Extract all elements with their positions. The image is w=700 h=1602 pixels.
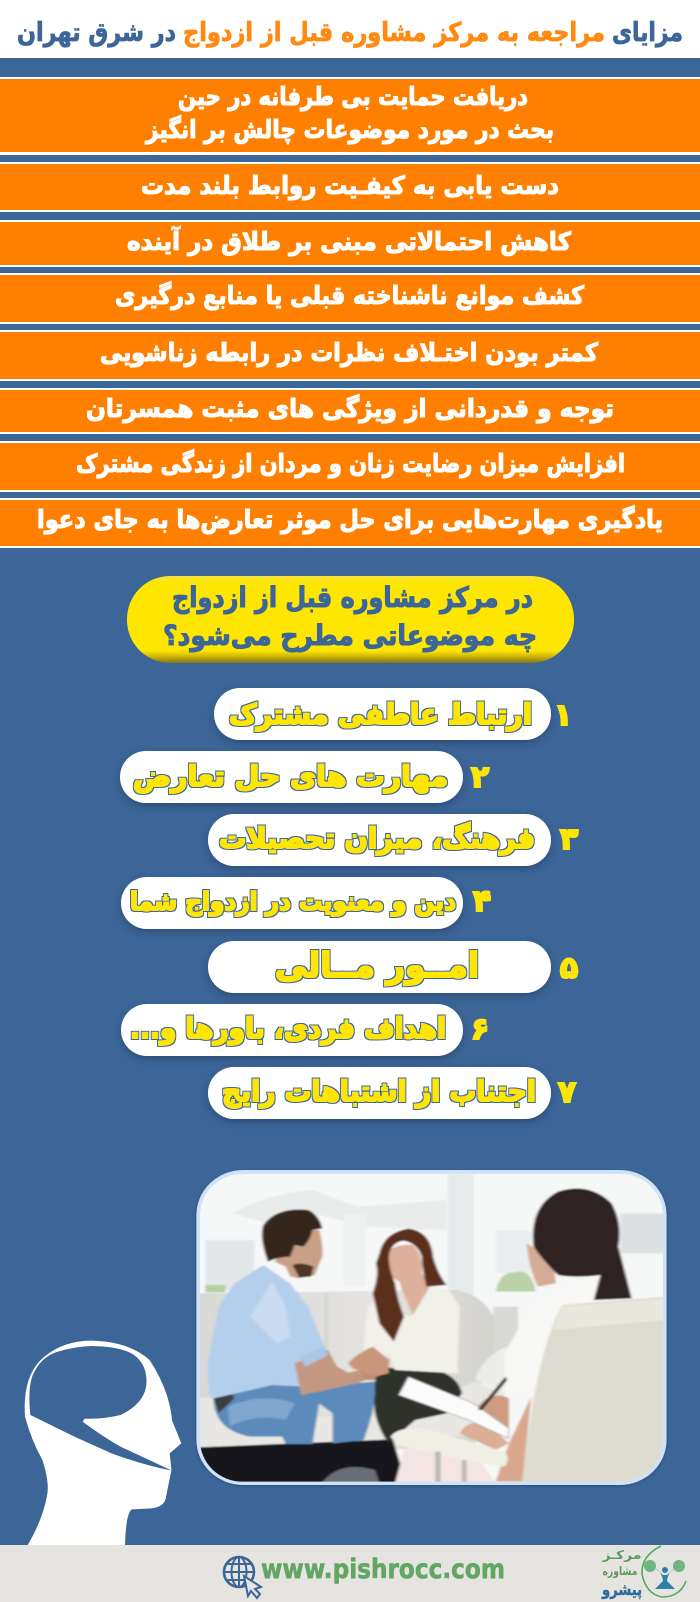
topic 4: دین و معنویت در ازدواج شما (130, 887, 456, 917)
logo: پیشرو (601, 1580, 642, 1600)
topic 2: مهارت های حل تعارض (133, 760, 448, 793)
panel: benefits list (0, 77, 700, 548)
logo: مرکـز (601, 1548, 642, 1562)
photo: counseling session (196, 1170, 670, 1485)
benefit 2: دست یابی به کیفـیت روابط بلند مدت (141, 171, 559, 201)
topic 1: ۱ (554, 698, 572, 733)
topic 5: امــور مــالی (275, 946, 479, 986)
heading: topics question (127, 576, 574, 663)
man (208, 1209, 386, 1444)
title: مراجعه به مرکز مشاوره قبل از ازدواج (183, 18, 605, 48)
benefit 4 (0, 273, 700, 324)
topic 2: ۲ (471, 760, 489, 795)
floor (199, 1439, 406, 1483)
topic 4: ۴ (473, 884, 491, 919)
topic 5: ۵ (560, 951, 578, 986)
topic 7: ۷ (558, 1075, 576, 1110)
counselor (391, 1189, 665, 1483)
benefit 5: کمتر بودن اختـلاف نظرات در رابطه زناشویی (100, 338, 598, 368)
topic 4 (121, 877, 491, 929)
topic 3 (208, 814, 578, 866)
topic 6: اهداف فردی، باورها و... (130, 1012, 446, 1045)
heading: topics question: در مرکز مشاوره قبل از ازدواج (172, 581, 533, 615)
topic 6: ۶ (471, 1012, 489, 1047)
benefit 8 (0, 498, 700, 548)
topic 7 (208, 1067, 576, 1119)
benefit 4: کشف موانع ناشناخته قبلی یا منابع درگیری (115, 281, 584, 311)
benefit 3 (0, 220, 700, 267)
sofa (196, 1290, 518, 1450)
heading: topics question: چه موضوعاتی مطرح می‌شود؟ (163, 619, 537, 652)
website address: www.pishrocc.com (261, 1554, 505, 1585)
benefit 1: دریافت حمایت بی طرفانه در حین (178, 82, 528, 112)
topic 5 (208, 941, 578, 993)
footer (0, 1545, 700, 1602)
icon: head silhouette (25, 1341, 181, 1545)
topic 3: فرهنگ، میزان تحصیلات (219, 822, 535, 855)
benefit 6: توجه و قدردانی از ویژگی های مثبت همسرتان (86, 394, 614, 424)
topic 3: ۳ (560, 822, 578, 857)
benefit 7 (0, 441, 700, 492)
benefit 1: بحث در مورد موضوعات چالش بر انگیز (144, 115, 554, 145)
icon: globe with cursor (224, 1557, 261, 1598)
logo (601, 1546, 686, 1600)
benefit 2 (0, 162, 700, 212)
title: در شرق تهران (17, 18, 176, 48)
benefit 5 (0, 330, 700, 381)
title: مزایای (612, 18, 683, 48)
topic 6 (121, 1004, 489, 1056)
woman (348, 1229, 462, 1443)
title (0, 0, 700, 58)
topic 1 (214, 688, 572, 740)
topic 7: اجتناب از اشتباهات رایج (222, 1075, 536, 1108)
logo: مشاوره (602, 1564, 638, 1579)
window scenery (205, 1174, 665, 1297)
benefit 1 (0, 77, 700, 155)
benefit 6 (0, 388, 700, 434)
benefit 3: کاهش احتمالاتی مبنی بر طلاق در آینده (127, 226, 571, 257)
topic 1: ارتباط عاطفی مشترک (229, 698, 532, 731)
topic 2 (120, 751, 489, 803)
